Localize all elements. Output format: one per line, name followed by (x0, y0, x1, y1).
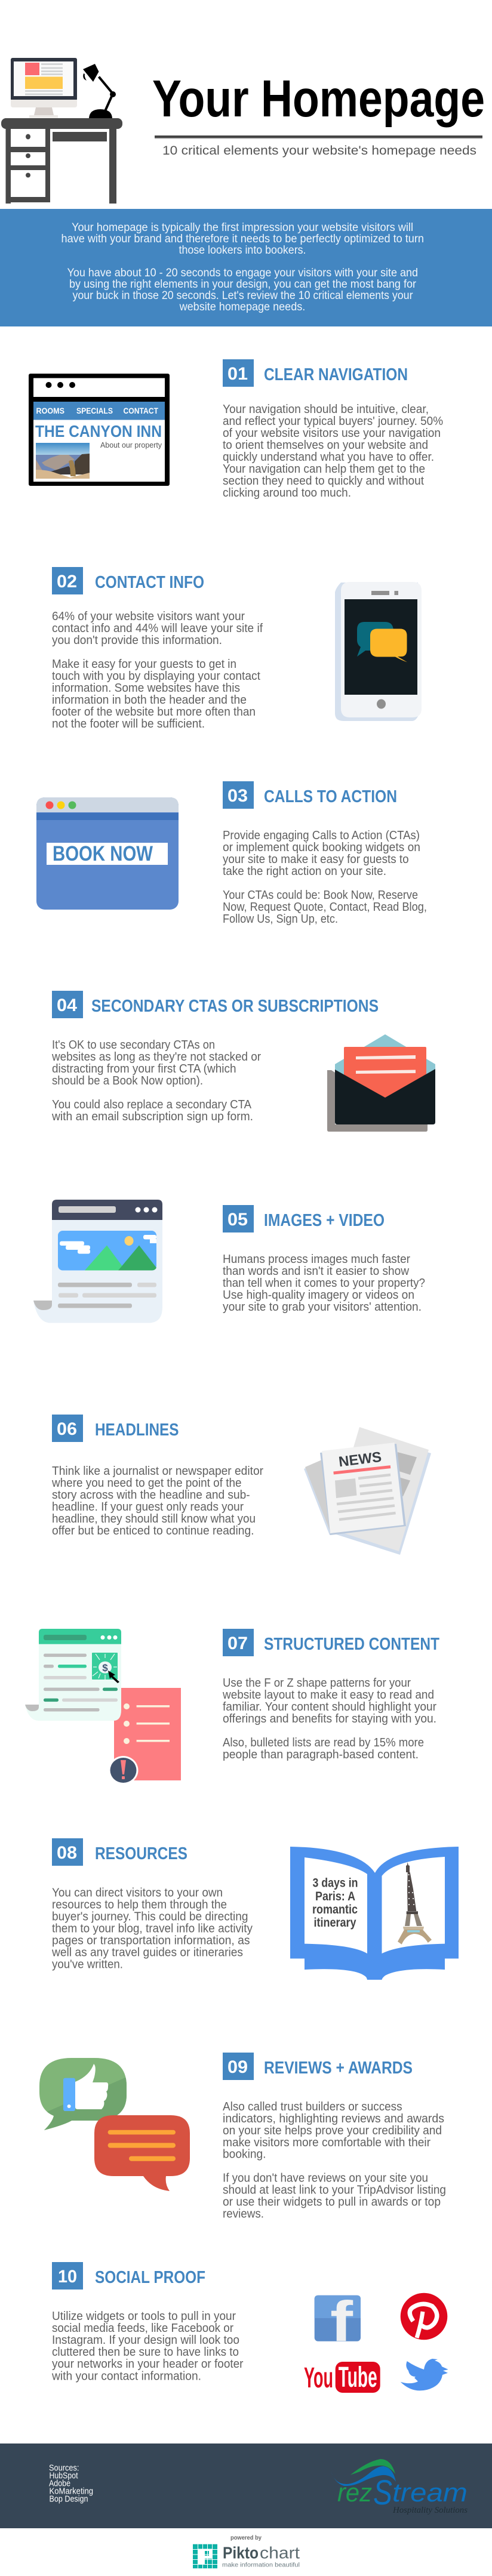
body text: Your CTAs could be: Book Now, Reserve (223, 889, 418, 902)
icon: youtube: Tube (339, 2362, 377, 2393)
sources text: Sources: (49, 2464, 79, 2473)
intro panel: You have about 10 - 20 seconds to engage your visitors with your site and (67, 267, 418, 279)
panel: 03 calls to action (36, 781, 427, 926)
body text: If you don't have reviews on your site you (223, 2171, 428, 2184)
body text: websites as long as they're not stacked or (51, 1050, 261, 1064)
body text (51, 1465, 263, 1537)
body text (223, 829, 427, 926)
subtitle: 10 critical elements your website's homepage needs (162, 144, 476, 158)
body text: booking. (223, 2147, 266, 2161)
icon: browser mockup (29, 374, 170, 486)
body text (51, 1039, 261, 1123)
body text: Provide engaging Calls to Action (CTAs) (223, 829, 420, 842)
icon: facebook (315, 2290, 361, 2354)
body text: section they need to quickly and without (223, 474, 424, 488)
panel: 01 clear navigation (29, 359, 443, 500)
number badge (223, 781, 254, 809)
number badge: 01 (227, 364, 248, 384)
number badge: 05 (227, 1210, 248, 1230)
body text: Humans process images much faster (223, 1253, 410, 1266)
body text: touch with you by displaying your contact (52, 670, 260, 683)
body text: of your website visitors use your navigation (223, 427, 441, 440)
body text: buyer's journey. This could be directing (52, 1910, 248, 1923)
icon: open book with itinerary and Eiffel tower (290, 1847, 459, 1980)
number badge: 07 (227, 1634, 248, 1653)
number badge: 09 (227, 2057, 248, 2077)
logo: Piktochart: Pikto (223, 2544, 259, 2562)
body text: to orient themselves on your website and (223, 439, 428, 452)
body text: Follow Us, Sign Up, etc. (223, 913, 338, 926)
icon: newspapers: NEWS (338, 1449, 382, 1470)
body text: story across with the headline and sub- (52, 1489, 250, 1502)
panel: 10 social proof (51, 2262, 448, 2394)
panel: 04 secondary ctas or subscriptions (51, 991, 435, 1132)
number badge (52, 1415, 83, 1442)
number badge: 08 (57, 1843, 77, 1863)
divider rule under title (155, 135, 482, 138)
intro panel: Your homepage is typically the first impression your website visitors will (72, 221, 413, 234)
body text (52, 610, 263, 731)
intro panel: those lookers into bookers. (179, 244, 306, 257)
body text (222, 1677, 436, 1761)
sources text: HubSpot (49, 2472, 78, 2481)
body text: headline, they should still know what you (52, 1512, 256, 1526)
logo: rezStream: rez (337, 2478, 372, 2507)
icon: browser mockup: CONTACT (123, 406, 158, 415)
body text: or implement quick booking widgets on (223, 841, 420, 854)
number badge (52, 2262, 83, 2290)
body text: Your navigation can help them get to the (223, 463, 425, 476)
body text: You could also replace a secondary CTA (52, 1098, 252, 1111)
body text: quickly understand what you have to offer. (223, 451, 434, 464)
logo: Piktochart: make information beautiful (222, 2562, 300, 2569)
body text: than words and isn't it easier to show (223, 1265, 410, 1278)
body text: Utilize widgets or tools to pull in your (52, 2310, 236, 2323)
body text: footer of the website but more often than (52, 705, 256, 719)
icon: envelope with letter (327, 1034, 435, 1132)
body text: not the footer will be sufficient. (52, 717, 205, 731)
body text: indicators, highlighting reviews and awards (223, 2112, 444, 2125)
icon: desk with monitor and lamp (1, 58, 122, 204)
body text: Instagram. If your design will look too (52, 2334, 239, 2347)
body text: Your navigation should be intuitive, clear, (223, 403, 429, 416)
body text: should be a Book Now option). (52, 1074, 203, 1087)
body text: resources to help them through the (52, 1898, 227, 1911)
panel: 09 reviews + awards (39, 2053, 446, 2220)
body text: than tell when it comes to your property? (223, 1277, 425, 1290)
icon: pinterest (401, 2293, 447, 2340)
body text: you've written. (52, 1958, 123, 1971)
icon: browser mockup: ROOMS (36, 406, 64, 415)
sources text (49, 2464, 93, 2504)
panel: 08 resources (51, 1838, 459, 1980)
body text: Think like a journalist or newspaper editor (52, 1465, 263, 1478)
heading: HEADLINES (95, 1421, 179, 1440)
panel: 07 structured content (25, 1629, 439, 1785)
heading: CLEAR NAVIGATION (264, 365, 408, 384)
number badge: 04 (57, 996, 77, 1015)
number badge (52, 991, 83, 1018)
number badge (223, 1205, 254, 1232)
body text: clicking around too much. (223, 486, 351, 500)
panel: 05 images + video (33, 1200, 425, 1323)
body text: offer but be enticed to continue reading. (52, 1524, 254, 1537)
body text: Use the F or Z shape patterns for your (223, 1677, 411, 1690)
icon: twitter (401, 2359, 448, 2390)
body text: information. Some websites have this (52, 682, 240, 695)
body text: 64% of your website visitors want your (52, 610, 245, 623)
intro panel: your buck in those 20 seconds. Let's review the 10 critical elements your (73, 289, 413, 302)
heading: REVIEWS + AWARDS (264, 2059, 413, 2078)
icon: open book with itinerary and Eiffel tower: itinerary (314, 1916, 356, 1930)
heading: CONTACT INFO (95, 573, 204, 592)
body text: them to your blog, travel info like activity (52, 1922, 253, 1935)
logo: rezStream: S (373, 2473, 392, 2512)
body text: distracting from your first CTA (which (52, 1062, 236, 1076)
icon: browser mockup: THE CANYON INN (35, 422, 162, 440)
number badge (52, 1838, 83, 1866)
intro panel: by using the right elements in your design, you can get the most bang for (69, 278, 417, 291)
logo: rezStream (331, 2459, 468, 2515)
number badge (223, 1629, 254, 1656)
panel: footer (0, 2443, 492, 2528)
body text: familiar. Your content should highlight your (223, 1700, 436, 1714)
body text: cluttered then be sure to have links to (52, 2346, 239, 2359)
body text: pages or transportation information, as (52, 1934, 250, 1947)
body text: take the right action on your site. (223, 865, 386, 878)
body text: people than paragraph-based content. (223, 1748, 419, 1761)
body text: Now, Request Quote, Contact, Read Blog, (223, 901, 427, 914)
icon: facebook: f (330, 2290, 353, 2354)
body text (51, 2310, 244, 2383)
icon: browser mockup: About our property (100, 440, 162, 449)
body text: website layout to make it easy to read and (222, 1688, 434, 1702)
body text (223, 1253, 425, 1314)
body text: you don't provide this information. (52, 634, 222, 647)
body text: You can direct visitors to your own (52, 1886, 223, 1899)
icon: youtube: You (304, 2362, 333, 2394)
logo: Piktochart (193, 2544, 300, 2569)
body text (223, 403, 443, 500)
number badge: 06 (57, 1419, 77, 1439)
number badge: 02 (57, 572, 77, 591)
number badge: 10 (58, 2267, 77, 2287)
icon: list document with page and alert (25, 1629, 181, 1785)
heading: STRUCTURED CONTENT (264, 1635, 439, 1654)
icon: browser with book now button: BOOK NOW (53, 842, 153, 865)
body text: should at least link to your TripAdvisor listing (223, 2183, 446, 2196)
body text: with your contact information. (51, 2369, 201, 2383)
body text: your site to make it easy for guests to (223, 853, 409, 866)
intro panel (0, 209, 492, 326)
body text: contact info and 44% will leave your site if (52, 622, 263, 635)
body text: information in both the header and the (52, 694, 247, 707)
intro panel: have with your brand and therefore it needs to be perfectly optimized to turn (61, 233, 424, 245)
body text: Make it easy for your guests to get in (52, 658, 236, 671)
icon: open book with itinerary and Eiffel tower: 3 days in (313, 1876, 358, 1890)
body text: your site to grab your visitors' attention. (223, 1301, 422, 1314)
icon: thumbs up and speech bubbles (39, 2058, 190, 2191)
body text (223, 2100, 446, 2220)
body text: social media feeds, like Facebook or (52, 2322, 233, 2335)
body text: where you need to get the point of the (51, 1477, 241, 1490)
icon: web page with landscape image (33, 1200, 162, 1323)
body text: offerings and benefits for staying with you. (223, 1712, 436, 1725)
body text: and reflect your typical buyers' journey. 50% (223, 415, 443, 428)
logo: Piktochart: chart (260, 2544, 300, 2562)
body text: on your site helps prove your credibility and (223, 2124, 442, 2137)
body text: your networks in your header or footer (52, 2358, 244, 2371)
body text: headline. If your guest only reads your (52, 1500, 244, 1514)
panel: 06 headlines (51, 1415, 431, 1555)
body text: make visitors more comfortable with their (223, 2136, 430, 2149)
logo: rezStream: Hospitality Solutions (392, 2506, 468, 2515)
body text: Also, bulleted lists are read by 15% more (223, 1736, 424, 1749)
heading: SOCIAL PROOF (95, 2268, 205, 2287)
intro panel: website homepage needs. (179, 301, 305, 313)
number badge (52, 567, 83, 594)
heading: CALLS TO ACTION (264, 787, 397, 806)
body text (51, 1886, 253, 1971)
icon: youtube (304, 2362, 380, 2394)
sources text: KoMarketing (49, 2487, 93, 2497)
icon: browser with book now button (36, 797, 179, 910)
number badge (223, 2053, 254, 2080)
body text: well as any travel guides or itineraries (51, 1946, 243, 1959)
icon: newspapers (304, 1427, 431, 1555)
heading: SECONDARY CTAS OR SUBSCRIPTIONS (91, 997, 379, 1016)
heading: IMAGES + VIDEO (264, 1211, 385, 1230)
icon: browser mockup: SPECIALS (76, 406, 113, 415)
icon: open book with itinerary and Eiffel tower: romantic (312, 1903, 358, 1916)
number badge (223, 359, 254, 387)
number badge: 03 (227, 786, 248, 806)
body text: or use their widgets to pull in awards or top (223, 2195, 441, 2208)
sources text: Bop Design (49, 2495, 88, 2504)
icon: smartphone with chat bubbles (335, 582, 422, 721)
icon: list document with page and alert: $ (102, 1662, 108, 1674)
sources text: Adobe (49, 2479, 70, 2489)
powered by text: powered by (230, 2534, 262, 2541)
body text: Use high-quality imagery or videos on (223, 1289, 414, 1302)
body text: It's OK to use secondary CTAs on (52, 1039, 215, 1052)
body text: Also called trust builders or success (223, 2100, 402, 2113)
body text: with an email subscription sign up form. (51, 1110, 253, 1123)
logo: rezStream: tream (392, 2478, 468, 2507)
icon: open book with itinerary and Eiffel tower: Paris: A (315, 1890, 355, 1903)
body text: reviews. (223, 2207, 264, 2220)
panel: 02 contact info (52, 567, 422, 731)
heading: RESOURCES (95, 1844, 187, 1863)
